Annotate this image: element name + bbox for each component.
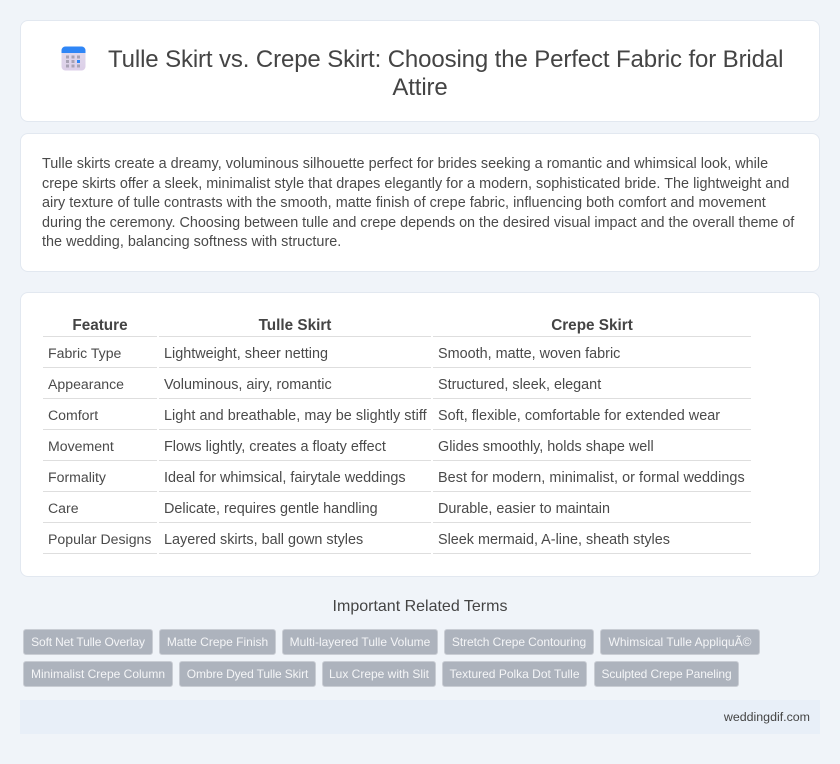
comparison table content: Soft, flexible, comfortable for extended wear [438, 408, 720, 424]
related term tags: Matte Crepe Finish [167, 635, 268, 649]
related term tags: Multi-layered Tulle Volume [290, 635, 430, 649]
related terms heading: Important Related Terms [333, 598, 507, 615]
icon: calendar [62, 46, 86, 70]
comparison table content: Smooth, matte, woven fabric [438, 346, 620, 362]
related term tags: Soft Net Tulle Overlay [31, 635, 145, 649]
comparison table content: Ideal for whimsical, fairytale weddings [164, 470, 406, 486]
comparison table content: Lightweight, sheer netting [164, 346, 328, 362]
comparison table content: Care [48, 500, 79, 516]
footer site name: weddingdif.com [724, 710, 810, 724]
comparison table content: Structured, sleek, elegant [438, 377, 601, 393]
comparison table content: Crepe Skirt [551, 317, 633, 334]
comparison table content: Tulle Skirt [259, 317, 331, 334]
title: Attire [392, 74, 448, 101]
intro text: during the ceremony. Choosing between tulle and crepe depends on the desired visual impact and the overall theme of [42, 215, 794, 231]
comparison table content: Glides smoothly, holds shape well [438, 439, 654, 455]
comparison table content: Sleek mermaid, A-line, sheath styles [438, 532, 670, 548]
comparison table content: Appearance [48, 376, 124, 392]
comparison table content [43, 317, 751, 554]
related term tags: Whimsical Tulle AppliquÃ© [609, 635, 751, 649]
intro text [42, 156, 794, 250]
intro text: Tulle skirts create a dreamy, voluminous silhouette perfect for brides seeking a romantic and whimsical look, while [42, 156, 768, 172]
comparison table content: Delicate, requires gentle handling [164, 501, 378, 517]
related term tags: Stretch Crepe Contouring [452, 635, 586, 649]
comparison table content: Voluminous, airy, romantic [164, 377, 332, 393]
title: Tulle Skirt vs. Crepe Skirt: Choosing the Perfect Fabric for Bridal [108, 46, 783, 73]
related term tags: Minimalist Crepe Column [31, 667, 165, 681]
comparison table content: Light and breathable, may be slightly stiff [164, 408, 427, 424]
intro text: the wedding, balancing softness with structure. [42, 234, 341, 250]
comparison table content: Comfort [48, 407, 98, 423]
header card [20, 20, 820, 122]
related term tags: Sculpted Crepe Paneling [602, 667, 732, 681]
related term tags: Textured Polka Dot Tulle [449, 667, 580, 681]
related term tags [23, 629, 760, 687]
panel: introduction paragraph [20, 133, 820, 272]
panel: comparison table [20, 292, 820, 577]
table header: Feature [72, 317, 128, 334]
related term tags: Ombre Dyed Tulle Skirt [187, 667, 308, 681]
related term tags: Lux Crepe with Slit [329, 667, 429, 681]
comparison table content: Popular Designs [48, 531, 151, 547]
footer [20, 700, 820, 734]
comparison table content: Formality [48, 469, 106, 485]
comparison table content: Durable, easier to maintain [438, 501, 610, 517]
title [108, 46, 783, 101]
intro text: airy texture of tulle contrasts with the smooth, matte finish of crepe fabric, influencing both comfort and movement [42, 195, 766, 211]
comparison table content: Flows lightly, creates a floaty effect [164, 439, 386, 455]
comparison table content: Fabric Type [48, 345, 121, 361]
intro text: crepe skirts offer a sleek, minimalist style that drapes elegantly for a modern, sophisticated bride. The lightweight and [42, 176, 789, 192]
rows [43, 336, 157, 337]
comparison table content: Movement [48, 438, 114, 454]
comparison table content: Best for modern, minimalist, or formal weddings [438, 470, 745, 486]
comparison table content: Layered skirts, ball gown styles [164, 532, 363, 548]
